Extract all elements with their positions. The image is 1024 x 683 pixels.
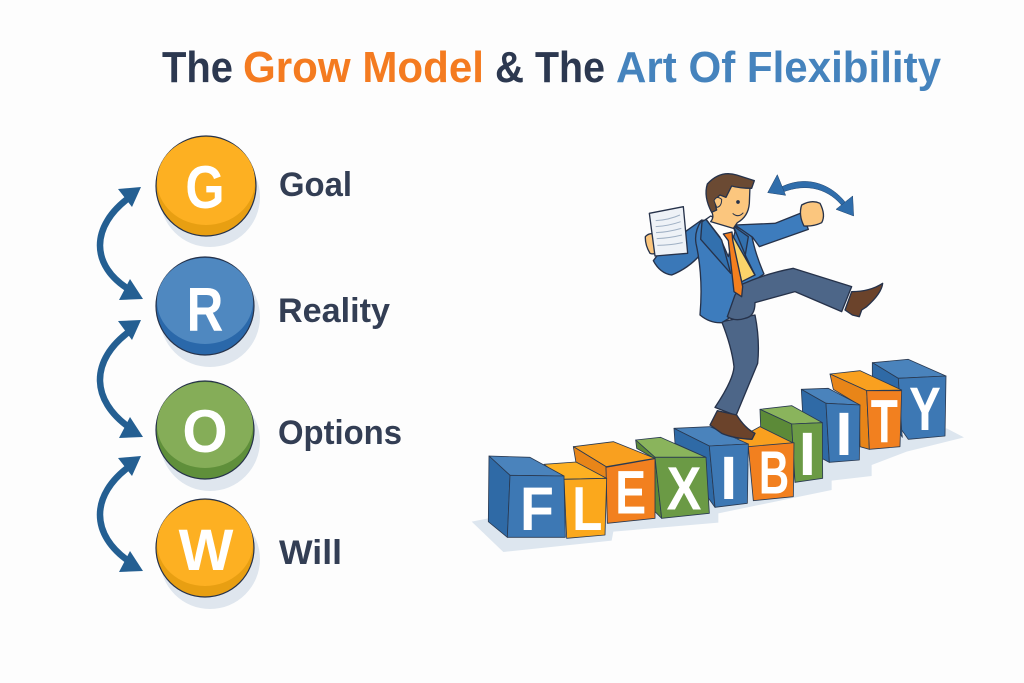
shirt (706, 216, 735, 257)
block: B: B (759, 438, 789, 507)
block: Y (872, 359, 946, 443)
title: Grow Model (243, 43, 484, 92)
paper (649, 207, 688, 256)
block: Y: Y (909, 374, 941, 443)
icon: curved double arrow (768, 175, 854, 216)
step: G goal: Goal (279, 166, 352, 204)
right lapel (733, 226, 755, 275)
panel: GROW model (100, 136, 402, 609)
standing leg (715, 315, 758, 416)
arrow: goal and reality (100, 187, 143, 300)
block: X (636, 437, 709, 523)
character: businessman kicking (645, 174, 883, 439)
face details (714, 197, 743, 216)
block: I blue (801, 388, 860, 469)
left lapel (701, 219, 731, 273)
step: W will (156, 499, 342, 609)
step: O options: O (182, 397, 228, 465)
arrow: options and will (100, 456, 143, 572)
block: E: E (615, 458, 646, 527)
title: The (535, 43, 605, 92)
tie (723, 232, 743, 297)
step: R reality: Reality (278, 292, 390, 330)
block: L: L (572, 474, 602, 543)
title (162, 43, 941, 92)
block: I green (760, 406, 823, 489)
step: W will: W (179, 518, 234, 583)
title: & (495, 43, 524, 92)
step: G goal: G (185, 154, 225, 221)
block: F: F (520, 475, 554, 544)
block: T (830, 371, 902, 456)
arrow: reality and options (100, 320, 143, 438)
block: E (573, 442, 655, 527)
step: R reality: R (187, 276, 223, 345)
vest (732, 234, 755, 282)
hair (706, 174, 754, 212)
block: I middle (674, 427, 748, 513)
block: I green: I (799, 420, 816, 489)
step: O options (156, 381, 402, 491)
flexibility blocks (472, 359, 964, 552)
block: L (544, 462, 607, 543)
block: B (737, 427, 794, 507)
outstretched arm (735, 213, 808, 247)
step: R reality (156, 257, 390, 367)
step: O options: Options (278, 414, 402, 452)
raised leg (727, 268, 852, 320)
suit jacket (696, 220, 764, 323)
block: I middle: I (720, 444, 737, 513)
block: X: X (667, 454, 701, 523)
title: The (162, 43, 233, 92)
back arm (653, 220, 702, 275)
block: T: T (871, 388, 898, 456)
fist (800, 202, 823, 226)
head (711, 183, 750, 228)
title: Art Of Flexibility (616, 43, 941, 92)
block shadow (472, 428, 964, 552)
block: I blue: I (835, 400, 853, 469)
raised shoe (845, 283, 883, 317)
block: F (488, 456, 565, 544)
step: G goal (156, 136, 352, 247)
hand holding paper (645, 234, 658, 254)
standing shoe (710, 411, 755, 439)
step: W will: Will (279, 534, 342, 572)
